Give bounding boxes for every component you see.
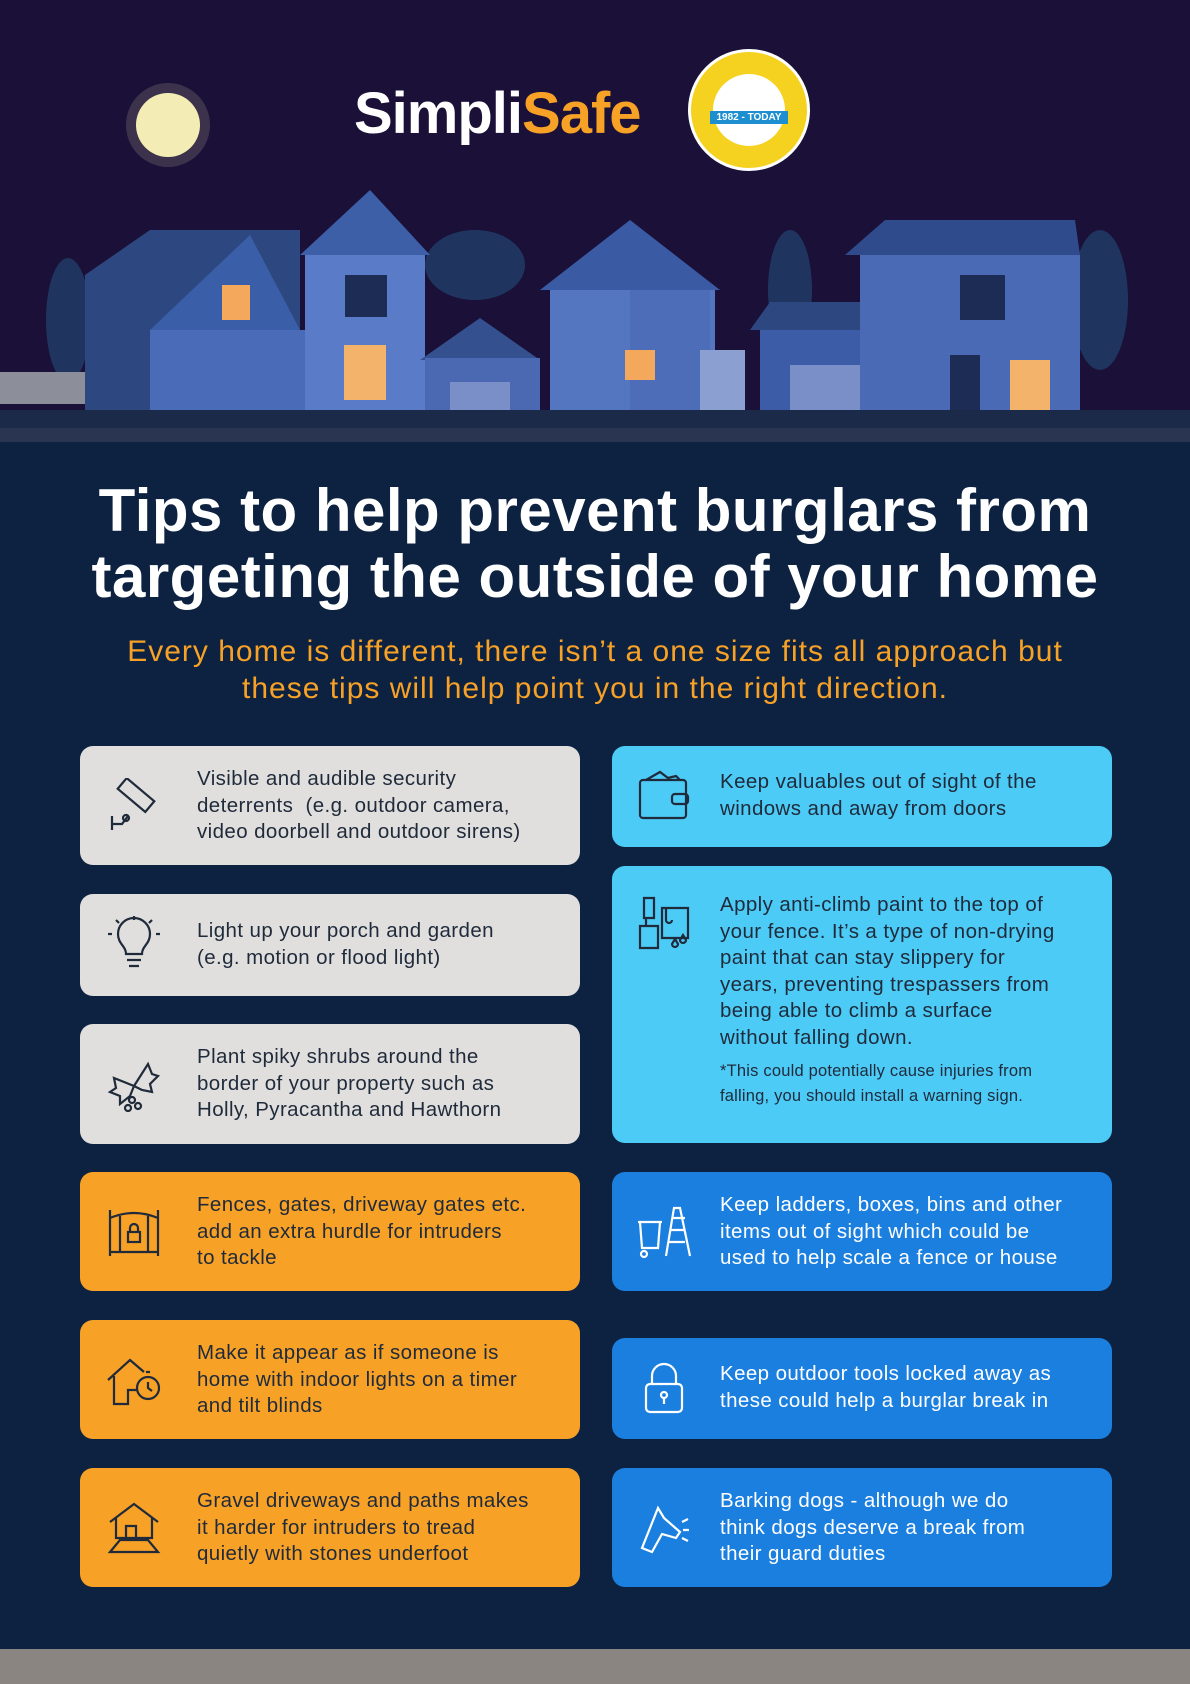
text: Apply anti-climb paint to the top of	[720, 893, 1043, 916]
card: gravel	[80, 1468, 580, 1587]
text: (e.g. motion or flood light)	[197, 946, 441, 968]
card: tools locked	[612, 1338, 1112, 1439]
text: Visible and audible security	[197, 767, 456, 790]
icon: house timer	[107, 1358, 160, 1406]
icon: gravel house	[108, 1502, 160, 1554]
logo: neighbourhood watch badge	[688, 49, 810, 171]
text: to tackle	[197, 1246, 277, 1269]
icon: gate	[108, 1210, 160, 1256]
text: Gravel driveways and paths makes	[197, 1489, 529, 1512]
card: dogs	[612, 1468, 1112, 1587]
text: quietly with stones underfoot	[197, 1542, 468, 1565]
icon: ladder bin	[638, 1206, 692, 1258]
text	[197, 1489, 529, 1565]
text: years, preventing trespassers from	[720, 972, 1049, 996]
text	[720, 1362, 1051, 1412]
text	[720, 770, 1037, 820]
text: Keep ladders, boxes, bins and other	[720, 1193, 1062, 1216]
text: windows and away from doors	[720, 796, 1007, 820]
text: Fences, gates, driveway gates etc.	[197, 1193, 526, 1216]
text: Keep valuables out of sight of the	[720, 770, 1037, 793]
text: items out of sight which could be	[720, 1220, 1029, 1242]
text	[197, 1193, 526, 1269]
card: anti-climb paint	[612, 866, 1112, 1143]
text: add an extra hurdle for intruders	[197, 1220, 502, 1242]
subtitle: Every home is different, there isn’t a one size fits all approach but	[127, 635, 1063, 668]
background trees	[46, 230, 1128, 382]
card: security deterrents	[80, 746, 580, 865]
text	[197, 1045, 501, 1121]
text: it harder for intruders to tread	[197, 1516, 475, 1538]
text: deterrents (e.g. outdoor camera,	[197, 794, 510, 816]
footer strip	[0, 1649, 1190, 1684]
icon: padlock	[644, 1362, 684, 1414]
text: paint that can stay slippery for	[720, 946, 1005, 969]
text: Holly, Pyracantha and Hawthorn	[197, 1098, 501, 1121]
text: without falling down.	[720, 1026, 913, 1048]
icon: camera	[110, 778, 156, 830]
text	[197, 767, 521, 843]
text: border of your property such as	[197, 1072, 494, 1094]
header night scene	[0, 0, 1190, 442]
text: home with indoor lights on a timer	[197, 1368, 517, 1390]
text: think dogs deserve a break from	[720, 1516, 1025, 1538]
text: video doorbell and outdoor sirens)	[197, 820, 521, 843]
logo: neighbourhood watch badge: 1982 - TODAY	[716, 112, 782, 123]
text	[720, 1193, 1062, 1269]
houses	[85, 190, 1080, 420]
text: Plant spiky shrubs around the	[197, 1045, 479, 1068]
text	[197, 1341, 517, 1417]
title	[91, 477, 1099, 610]
moon	[126, 83, 210, 167]
icon: holly	[108, 1062, 160, 1112]
subtitle: these tips will help point you in the right direction.	[242, 672, 948, 705]
card: lighting	[80, 894, 580, 996]
fence	[0, 372, 90, 404]
text: these could help a burglar break in	[720, 1388, 1049, 1412]
text: falling, you should install a warning sign.	[720, 1087, 1023, 1105]
text: their guard duties	[720, 1542, 886, 1565]
logo: SimpliSafe: SimpliSafe	[354, 81, 641, 146]
card: timer lights	[80, 1320, 580, 1439]
text: *This could potentially cause injuries from	[720, 1062, 1032, 1080]
card: fences	[80, 1172, 580, 1291]
card: valuables	[612, 746, 1112, 847]
text: being able to climb a surface	[720, 999, 993, 1022]
title: Tips to help prevent burglars from	[99, 477, 1091, 544]
subtitle	[127, 635, 1063, 705]
text	[720, 1489, 1025, 1565]
card: shrubs	[80, 1024, 580, 1144]
text: Keep outdoor tools locked away as	[720, 1362, 1051, 1385]
text	[197, 919, 494, 968]
text: Barking dogs - although we do	[720, 1489, 1009, 1512]
icon: paint	[638, 896, 690, 950]
text	[720, 893, 1055, 1105]
text: used to help scale a fence or house	[720, 1246, 1058, 1269]
text: Light up your porch and garden	[197, 919, 494, 942]
card: ladders	[612, 1172, 1112, 1291]
icon: wallet	[638, 770, 690, 820]
title: targeting the outside of your home	[91, 543, 1099, 610]
icon: dog	[640, 1506, 689, 1554]
icon: bulb	[108, 916, 160, 968]
text: your fence. It’s a type of non-drying	[720, 920, 1055, 942]
text: Make it appear as if someone is	[197, 1341, 499, 1364]
text: and tilt blinds	[197, 1394, 323, 1417]
